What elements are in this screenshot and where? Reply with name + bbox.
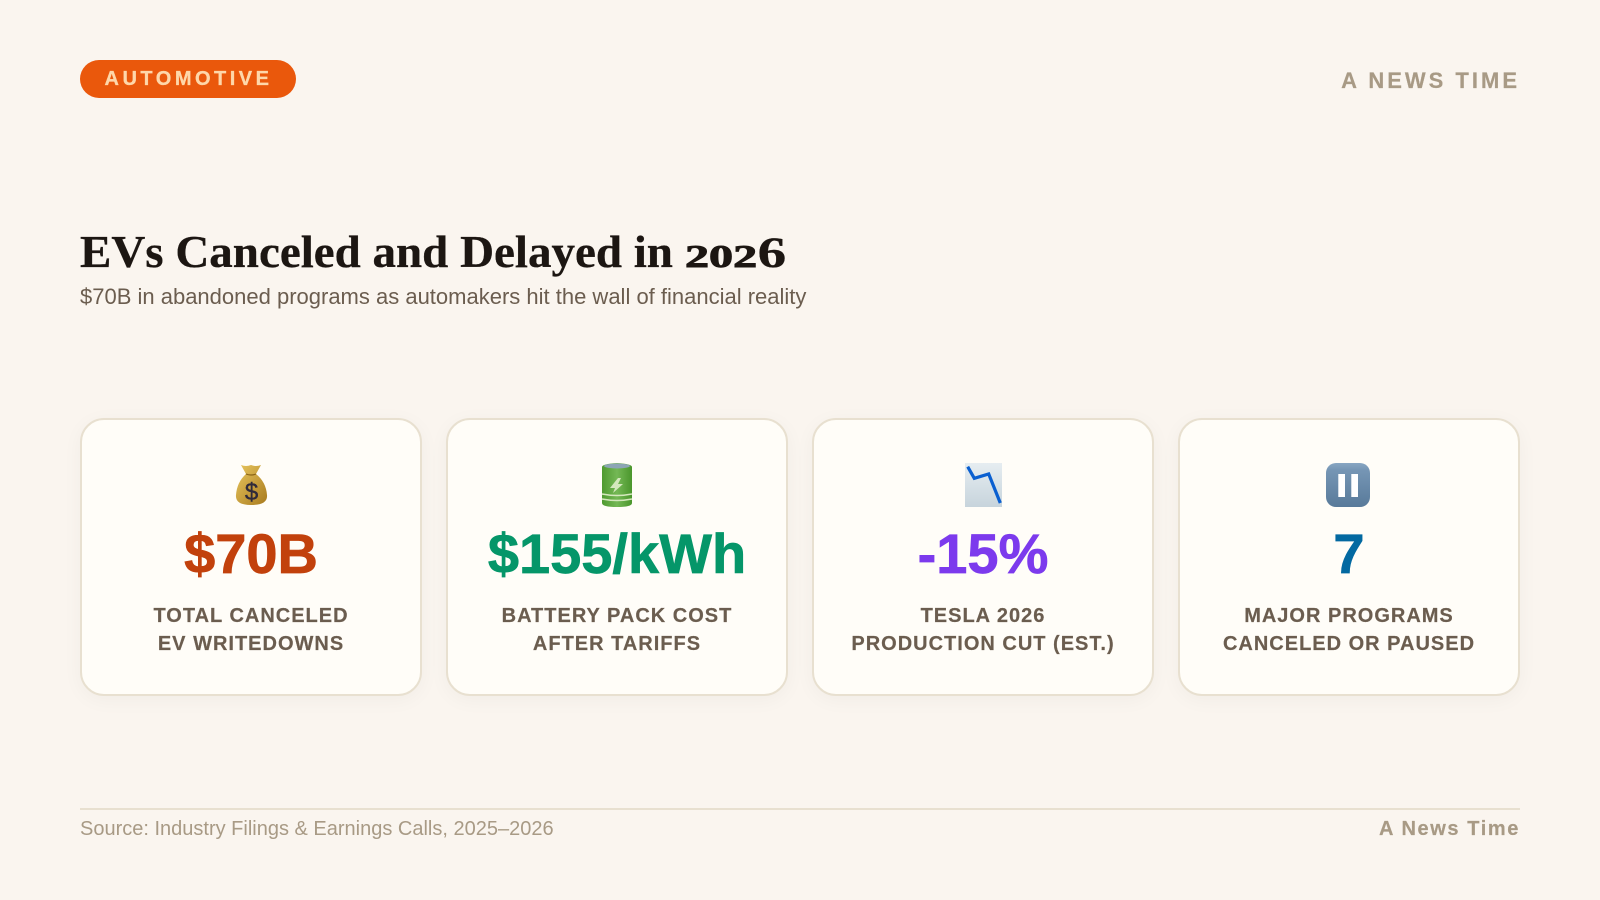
panel: battery pack cost: [446, 418, 788, 696]
label: TOTAL CANCELED: [153, 605, 349, 627]
icon: money bag: $: [245, 479, 258, 506]
value: -15%: [918, 522, 1048, 585]
source: Source: Industry Filings & Earnings Calls, 2025–2026: [80, 818, 554, 840]
title: EVs Canceled and Delayed in: [80, 226, 673, 277]
label: EV WRITEDOWNS: [158, 633, 344, 655]
brand footer: A News Time: [1379, 818, 1520, 840]
label: TESLA 2026: [921, 605, 1045, 627]
icon: pause button: [1326, 463, 1370, 507]
panel: major programs: [1178, 418, 1520, 696]
panel: tesla production cut: [812, 418, 1154, 696]
value: $155/kWh: [488, 522, 746, 585]
label: [502, 605, 732, 655]
title: 6: [757, 230, 786, 277]
icon: battery: [602, 463, 632, 507]
value: $70B: [184, 522, 318, 585]
icon: money bag: [236, 465, 268, 506]
label: AFTER TARIFFS: [533, 633, 701, 655]
label: MAJOR PROGRAMS: [1244, 605, 1454, 627]
label: [153, 605, 349, 655]
label: PRODUCTION CUT (EST.): [851, 633, 1115, 655]
label: [851, 605, 1115, 655]
brand top right: A NEWS TIME: [1341, 68, 1520, 93]
label: BATTERY PACK COST: [502, 605, 732, 627]
panel: total canceled writedowns: [80, 418, 422, 696]
icon: falling chart: [965, 463, 1002, 507]
label: CANCELED OR PAUSED: [1223, 633, 1475, 655]
category pill: [80, 60, 296, 98]
label: [1223, 605, 1475, 655]
subtitle: $70B in abandoned programs as automakers hit the wall of financial reality: [80, 284, 806, 309]
category pill: AUTOMOTIVE: [105, 68, 272, 90]
value: 7: [1333, 522, 1365, 585]
title: 202: [685, 238, 757, 274]
